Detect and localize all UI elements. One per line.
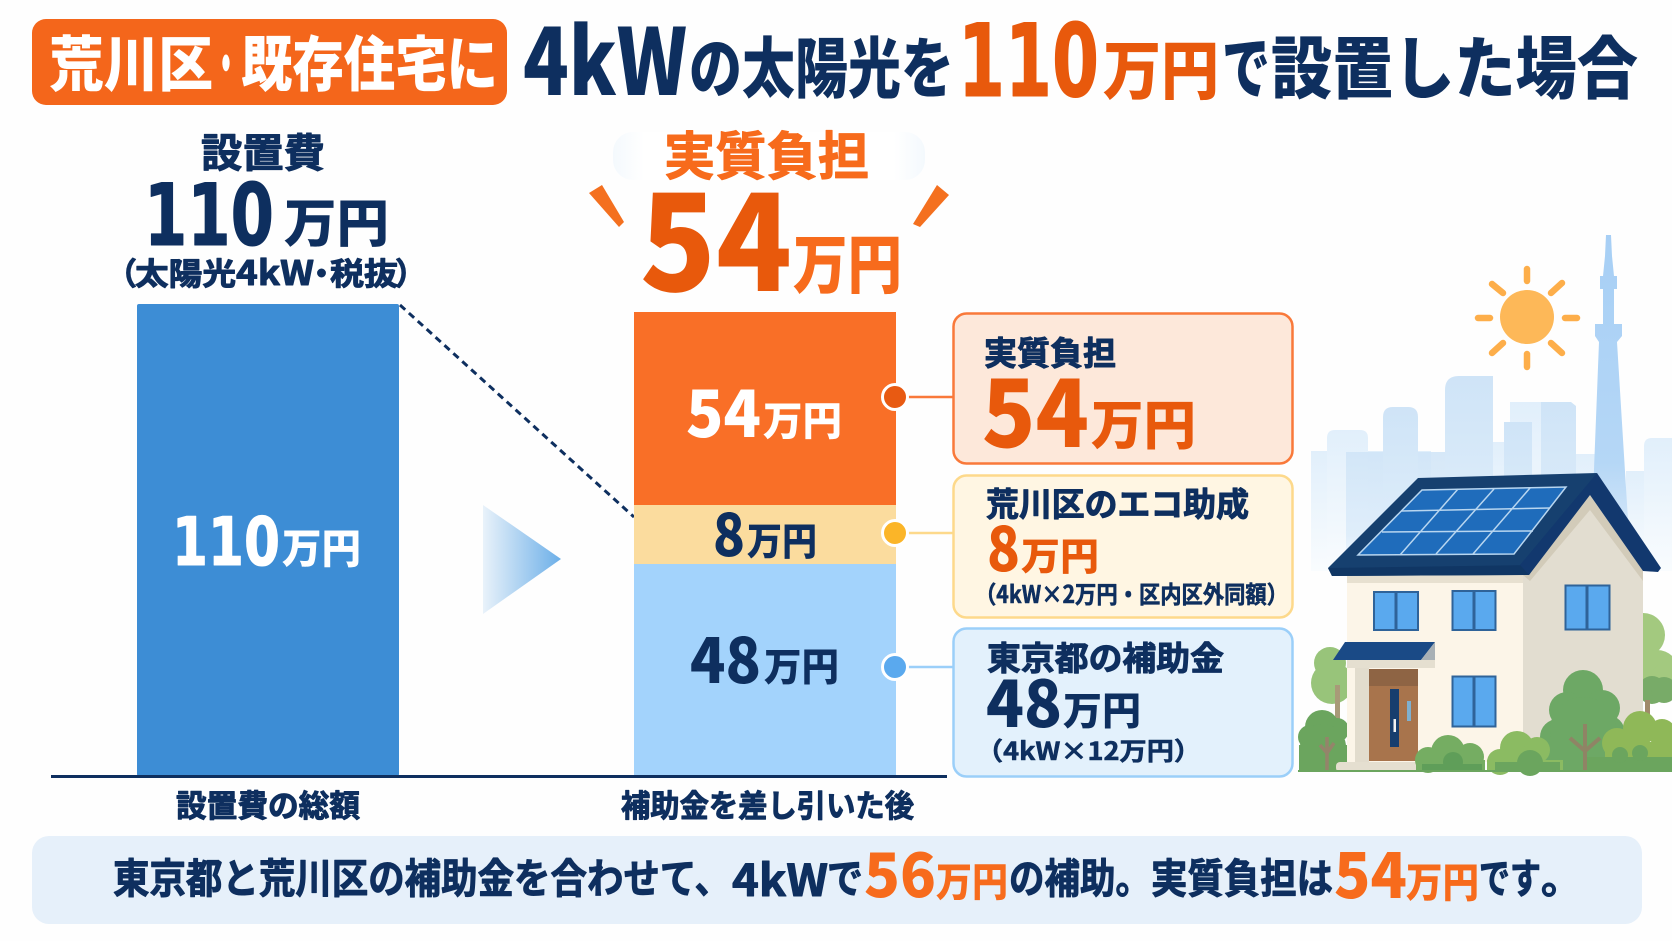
segment: Tokyo 48 <box>634 564 896 776</box>
axis label: after subsidies: 補助金を差し引いた後 <box>621 781 914 826</box>
dashed connector <box>400 305 634 517</box>
burst mark right <box>913 185 949 227</box>
callout: Tokyo subsidy: （4kW×12万円） <box>976 732 1201 768</box>
callout: Arakawa eco subsidy: 万円 <box>1021 526 1099 581</box>
callout: effective cost: 万円 <box>1091 384 1196 460</box>
title <box>32 0 1638 122</box>
title text: 110 <box>958 2 1099 120</box>
axis label: total: 設置費の総額 <box>176 781 360 826</box>
callout: Arakawa eco subsidy: 荒川区のエコ助成 <box>986 478 1249 526</box>
segment: Arakawa 8: 万円 <box>747 511 817 566</box>
heading: installation cost <box>106 121 426 295</box>
heading: installation cost: ） <box>395 249 426 294</box>
heading: installation cost: 太陽光 <box>135 249 236 294</box>
bar: total cost: 万円 <box>282 515 361 575</box>
title text: の太陽光を <box>689 16 954 112</box>
title text: 万円 <box>1103 21 1219 113</box>
roof <box>1328 473 1661 576</box>
stacked bar: after subsidies <box>634 312 896 776</box>
heading: installation cost: ・ <box>306 249 337 294</box>
illustration: city, sun and solar house <box>1298 235 1672 776</box>
footer summary banner: 東京都と荒川区の補助金を合わせて、 <box>113 845 731 905</box>
callout: Tokyo subsidy: 東京都の補助金 <box>987 632 1224 680</box>
footer summary banner: 。 <box>1541 845 1582 905</box>
heading: installation cost: 万円 <box>284 182 389 257</box>
title badge: 荒川区 <box>49 17 213 104</box>
footer summary banner: 万円 <box>936 850 1008 908</box>
callout: Arakawa eco subsidy: （4kW×2万円・区内区外同額） <box>975 575 1288 610</box>
connector: 8 <box>882 520 954 546</box>
sun <box>1478 269 1577 367</box>
callout: effective cost: 54 <box>982 341 1089 474</box>
heading: effective cost <box>589 115 949 330</box>
footer summary banner <box>32 826 1642 924</box>
bar: total cost: 110 <box>172 503 280 581</box>
tokyo skytree <box>1592 235 1628 520</box>
tree left of house <box>1298 710 1349 771</box>
connector: 54 <box>882 384 954 410</box>
heading: effective cost: 万円 <box>793 215 902 307</box>
footer summary banner: 54 <box>1334 826 1407 916</box>
windows <box>1374 585 1610 727</box>
faint halo behind heading <box>613 132 925 180</box>
title text <box>523 0 1638 122</box>
heading: installation cost: 4kW <box>236 246 314 295</box>
footer summary banner: です <box>1479 845 1541 905</box>
heading: installation cost: （ <box>106 249 137 294</box>
segment: Tokyo 48: 万円 <box>764 637 839 693</box>
title badge <box>32 17 507 105</box>
segment: effective cost 54: 万円 <box>763 389 842 447</box>
segment: Tokyo 48: 48 <box>690 611 761 701</box>
heading: effective cost: 54 <box>640 139 792 330</box>
callout: Tokyo subsidy <box>954 628 1292 776</box>
arrow triangle <box>483 505 561 614</box>
solar panels <box>1358 487 1566 555</box>
callout: Arakawa eco subsidy <box>954 476 1292 618</box>
skyline <box>1311 376 1672 571</box>
footer summary banner: 実質負担は <box>1151 845 1333 905</box>
segment: Arakawa 8 <box>634 489 896 573</box>
burst mark left <box>589 185 624 227</box>
footer summary banner: 4kW <box>732 845 828 909</box>
title badge: 既存住宅に <box>241 17 498 104</box>
callout: Tokyo subsidy: 48 <box>986 654 1062 746</box>
title text: 設置した場合 <box>1271 14 1638 113</box>
house side wall <box>1523 495 1643 745</box>
footer summary banner: 万円 <box>1406 849 1479 909</box>
callout: effective cost: 実質負担 <box>984 327 1116 375</box>
segment: Arakawa 8: 8 <box>713 489 745 573</box>
footer summary banner: 56 <box>864 828 936 915</box>
callout: Tokyo subsidy: 万円 <box>1063 681 1141 737</box>
heading: installation cost: 設置費 <box>201 121 325 179</box>
bar: total cost <box>137 304 399 776</box>
connector: 48 <box>882 654 954 680</box>
heading: installation cost: 税抜 <box>330 249 398 294</box>
heading: effective cost: 実質負担 <box>664 115 869 190</box>
house front wall <box>1347 575 1523 762</box>
callout: effective cost <box>954 314 1292 474</box>
footer summary banner: で <box>827 845 863 905</box>
title text: で <box>1222 14 1270 113</box>
trees behind house <box>1311 613 1672 730</box>
porch and door <box>1333 642 1435 772</box>
title badge: ・ <box>213 17 239 104</box>
segment: effective cost 54 <box>634 312 896 505</box>
footer summary banner: の補助。 <box>1009 845 1151 905</box>
trees and bushes in front <box>1298 670 1672 776</box>
axis line <box>51 775 947 778</box>
segment: effective cost 54: 54 <box>686 364 761 456</box>
heading: installation cost: 110 <box>144 166 274 266</box>
callout: Arakawa eco subsidy: 8 <box>987 500 1020 589</box>
